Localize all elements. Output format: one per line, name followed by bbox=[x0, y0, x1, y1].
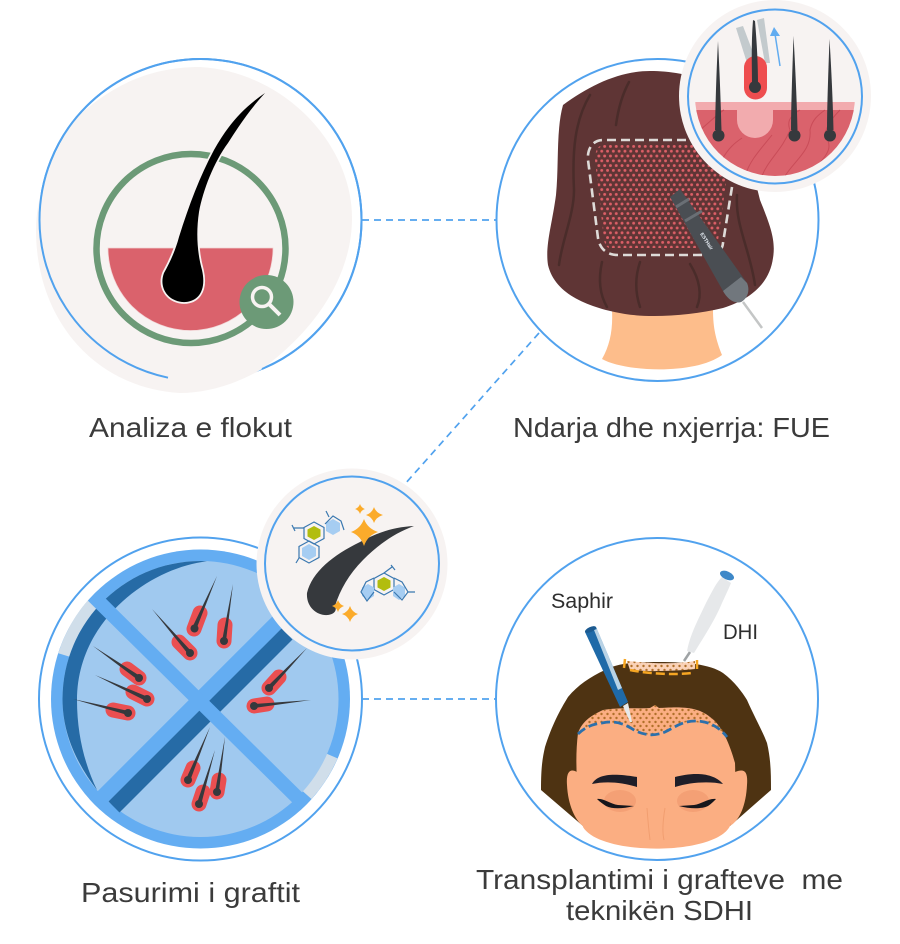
right lashes bbox=[679, 799, 716, 808]
right eyelid bbox=[677, 790, 709, 812]
hair strands bbox=[559, 82, 755, 307]
blue ring bbox=[40, 59, 362, 381]
neck bbox=[602, 310, 722, 369]
green ring bbox=[96, 154, 286, 343]
blue ring bbox=[688, 10, 862, 184]
extracted follicle bbox=[744, 20, 767, 100]
back of head hair bbox=[547, 71, 774, 316]
hair in skin 2 bbox=[788, 36, 800, 142]
arrow up bbox=[770, 27, 780, 66]
ears bbox=[567, 771, 747, 826]
connector: step 2 to step 3 bbox=[405, 333, 539, 484]
hair in skin 1 bbox=[712, 41, 724, 142]
donor dots area bbox=[595, 145, 730, 248]
Saphir pen bbox=[584, 625, 632, 722]
hair bbox=[541, 662, 771, 826]
caption: step 4 bbox=[476, 864, 843, 926]
skin cross-section bbox=[695, 102, 855, 176]
dark crescent bbox=[62, 561, 207, 790]
panel: graft enrichment bbox=[39, 538, 362, 860]
connector: step 1 to step 2 bbox=[362, 219, 497, 221]
blue ring visible over blob bbox=[40, 59, 362, 378]
label: Saphir: Saphir bbox=[551, 590, 613, 613]
left lashes bbox=[597, 799, 634, 808]
left eyebrow bbox=[592, 775, 637, 787]
caption: step 3: Pasurimi i graftit bbox=[81, 877, 300, 908]
label: DHI: DHI bbox=[723, 621, 758, 644]
connector: step 3 to step 4 bbox=[362, 698, 497, 700]
caption: step 1: Analiza e flokut bbox=[89, 412, 292, 443]
panel: enrichment detail bbox=[256, 468, 448, 660]
donor dashed border bbox=[624, 659, 697, 674]
hairline dots bbox=[585, 705, 722, 734]
cross bands bbox=[88, 590, 310, 812]
blue ring bbox=[496, 59, 818, 381]
face bbox=[576, 705, 735, 849]
panel: FUE extraction bbox=[496, 59, 818, 381]
FUE pen: ESTHair bbox=[698, 232, 714, 251]
dish interior bbox=[62, 561, 338, 837]
donor strip dots bbox=[627, 661, 695, 671]
blue dashed hairline bbox=[578, 721, 727, 737]
caption: step 4: teknikën SDHI bbox=[566, 895, 753, 926]
hair follicle bbox=[162, 93, 265, 302]
dashed donor border bbox=[588, 140, 732, 255]
panel: SDHI transplant bbox=[496, 538, 818, 860]
panel: hair analysis bbox=[36, 59, 362, 393]
sparkles bbox=[332, 504, 383, 622]
beige disc bbox=[679, 0, 871, 192]
hair strand bbox=[307, 526, 414, 615]
petri dish rim bbox=[51, 550, 350, 848]
molecule lower bbox=[361, 565, 415, 601]
icon: magnifier bbox=[240, 275, 294, 329]
head illustration bbox=[541, 659, 771, 849]
grafts: left group bbox=[73, 646, 151, 717]
blue ring bbox=[265, 476, 439, 650]
skin half circle bbox=[108, 248, 273, 330]
grafts: top group bbox=[152, 576, 233, 657]
panel: follicle extraction detail bbox=[679, 0, 871, 192]
caption: step 2: Ndarja dhe nxjerrja: FUE bbox=[513, 412, 830, 443]
grafts: right group bbox=[250, 648, 311, 710]
nose lines bbox=[647, 808, 665, 840]
FUE pen bbox=[670, 189, 762, 328]
tweezers bbox=[736, 18, 770, 63]
donor strip bbox=[627, 661, 695, 671]
rim highlights bbox=[64, 603, 332, 795]
caption: step 4: Transplantimi i grafteve me bbox=[476, 864, 843, 895]
blue ring bbox=[496, 538, 818, 860]
right eyebrow bbox=[675, 774, 723, 787]
beige disc bbox=[256, 468, 448, 660]
blue ring bbox=[39, 538, 362, 860]
hair in skin 3 bbox=[824, 39, 836, 142]
beige background blob bbox=[36, 67, 352, 393]
grafts: bottom group bbox=[184, 727, 225, 808]
molecule upper bbox=[292, 511, 344, 563]
DHI pen bbox=[684, 569, 735, 661]
left eyelid bbox=[604, 790, 636, 812]
